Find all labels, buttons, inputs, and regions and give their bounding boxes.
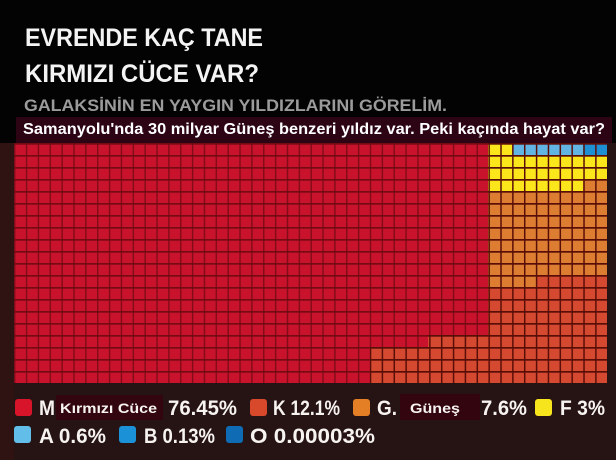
M red dwarf cells [14, 143, 607, 383]
question banner [16, 117, 612, 143]
title: EVRENDE KAÇ TANE [25, 24, 263, 52]
legend G: 7.6% [481, 397, 527, 420]
subtitle: GALAKSİNİN EN YAYGIN YILDIZLARINI GÖRELİM. [24, 96, 447, 115]
header background [0, 0, 616, 143]
K dwarf cells [370, 275, 607, 383]
left edge strip [0, 143, 14, 460]
legend B [119, 425, 215, 448]
legend G [353, 394, 527, 420]
title [25, 24, 263, 88]
legend K: K 12.1% [273, 397, 340, 420]
waffle chart of star types [14, 143, 607, 383]
legend M: Kırmızı Cüce [60, 400, 157, 416]
legend K [250, 397, 340, 420]
G Sun-like cells [488, 179, 607, 287]
A cells [512, 143, 583, 155]
legend B: B 0.13% [144, 425, 215, 448]
legend F: F 3% [560, 397, 605, 420]
B cells [583, 143, 607, 155]
legend O: O 0.00003% [250, 425, 375, 448]
legend G: G. [377, 397, 397, 420]
legend A: A 0.6% [39, 425, 106, 448]
F cells [488, 143, 607, 191]
legend F [535, 397, 605, 420]
title: KIRMIZI CÜCE VAR? [25, 59, 259, 88]
legend M: 76.45% [168, 397, 237, 420]
question banner: Samanyolu'nda 30 milyar Güneş benzeri yıldız var. Peki kaçında hayat var? [23, 121, 605, 138]
legend [14, 394, 605, 448]
legend M [15, 395, 237, 420]
legend M: M [39, 397, 55, 420]
legend G: Güneş [410, 400, 460, 416]
